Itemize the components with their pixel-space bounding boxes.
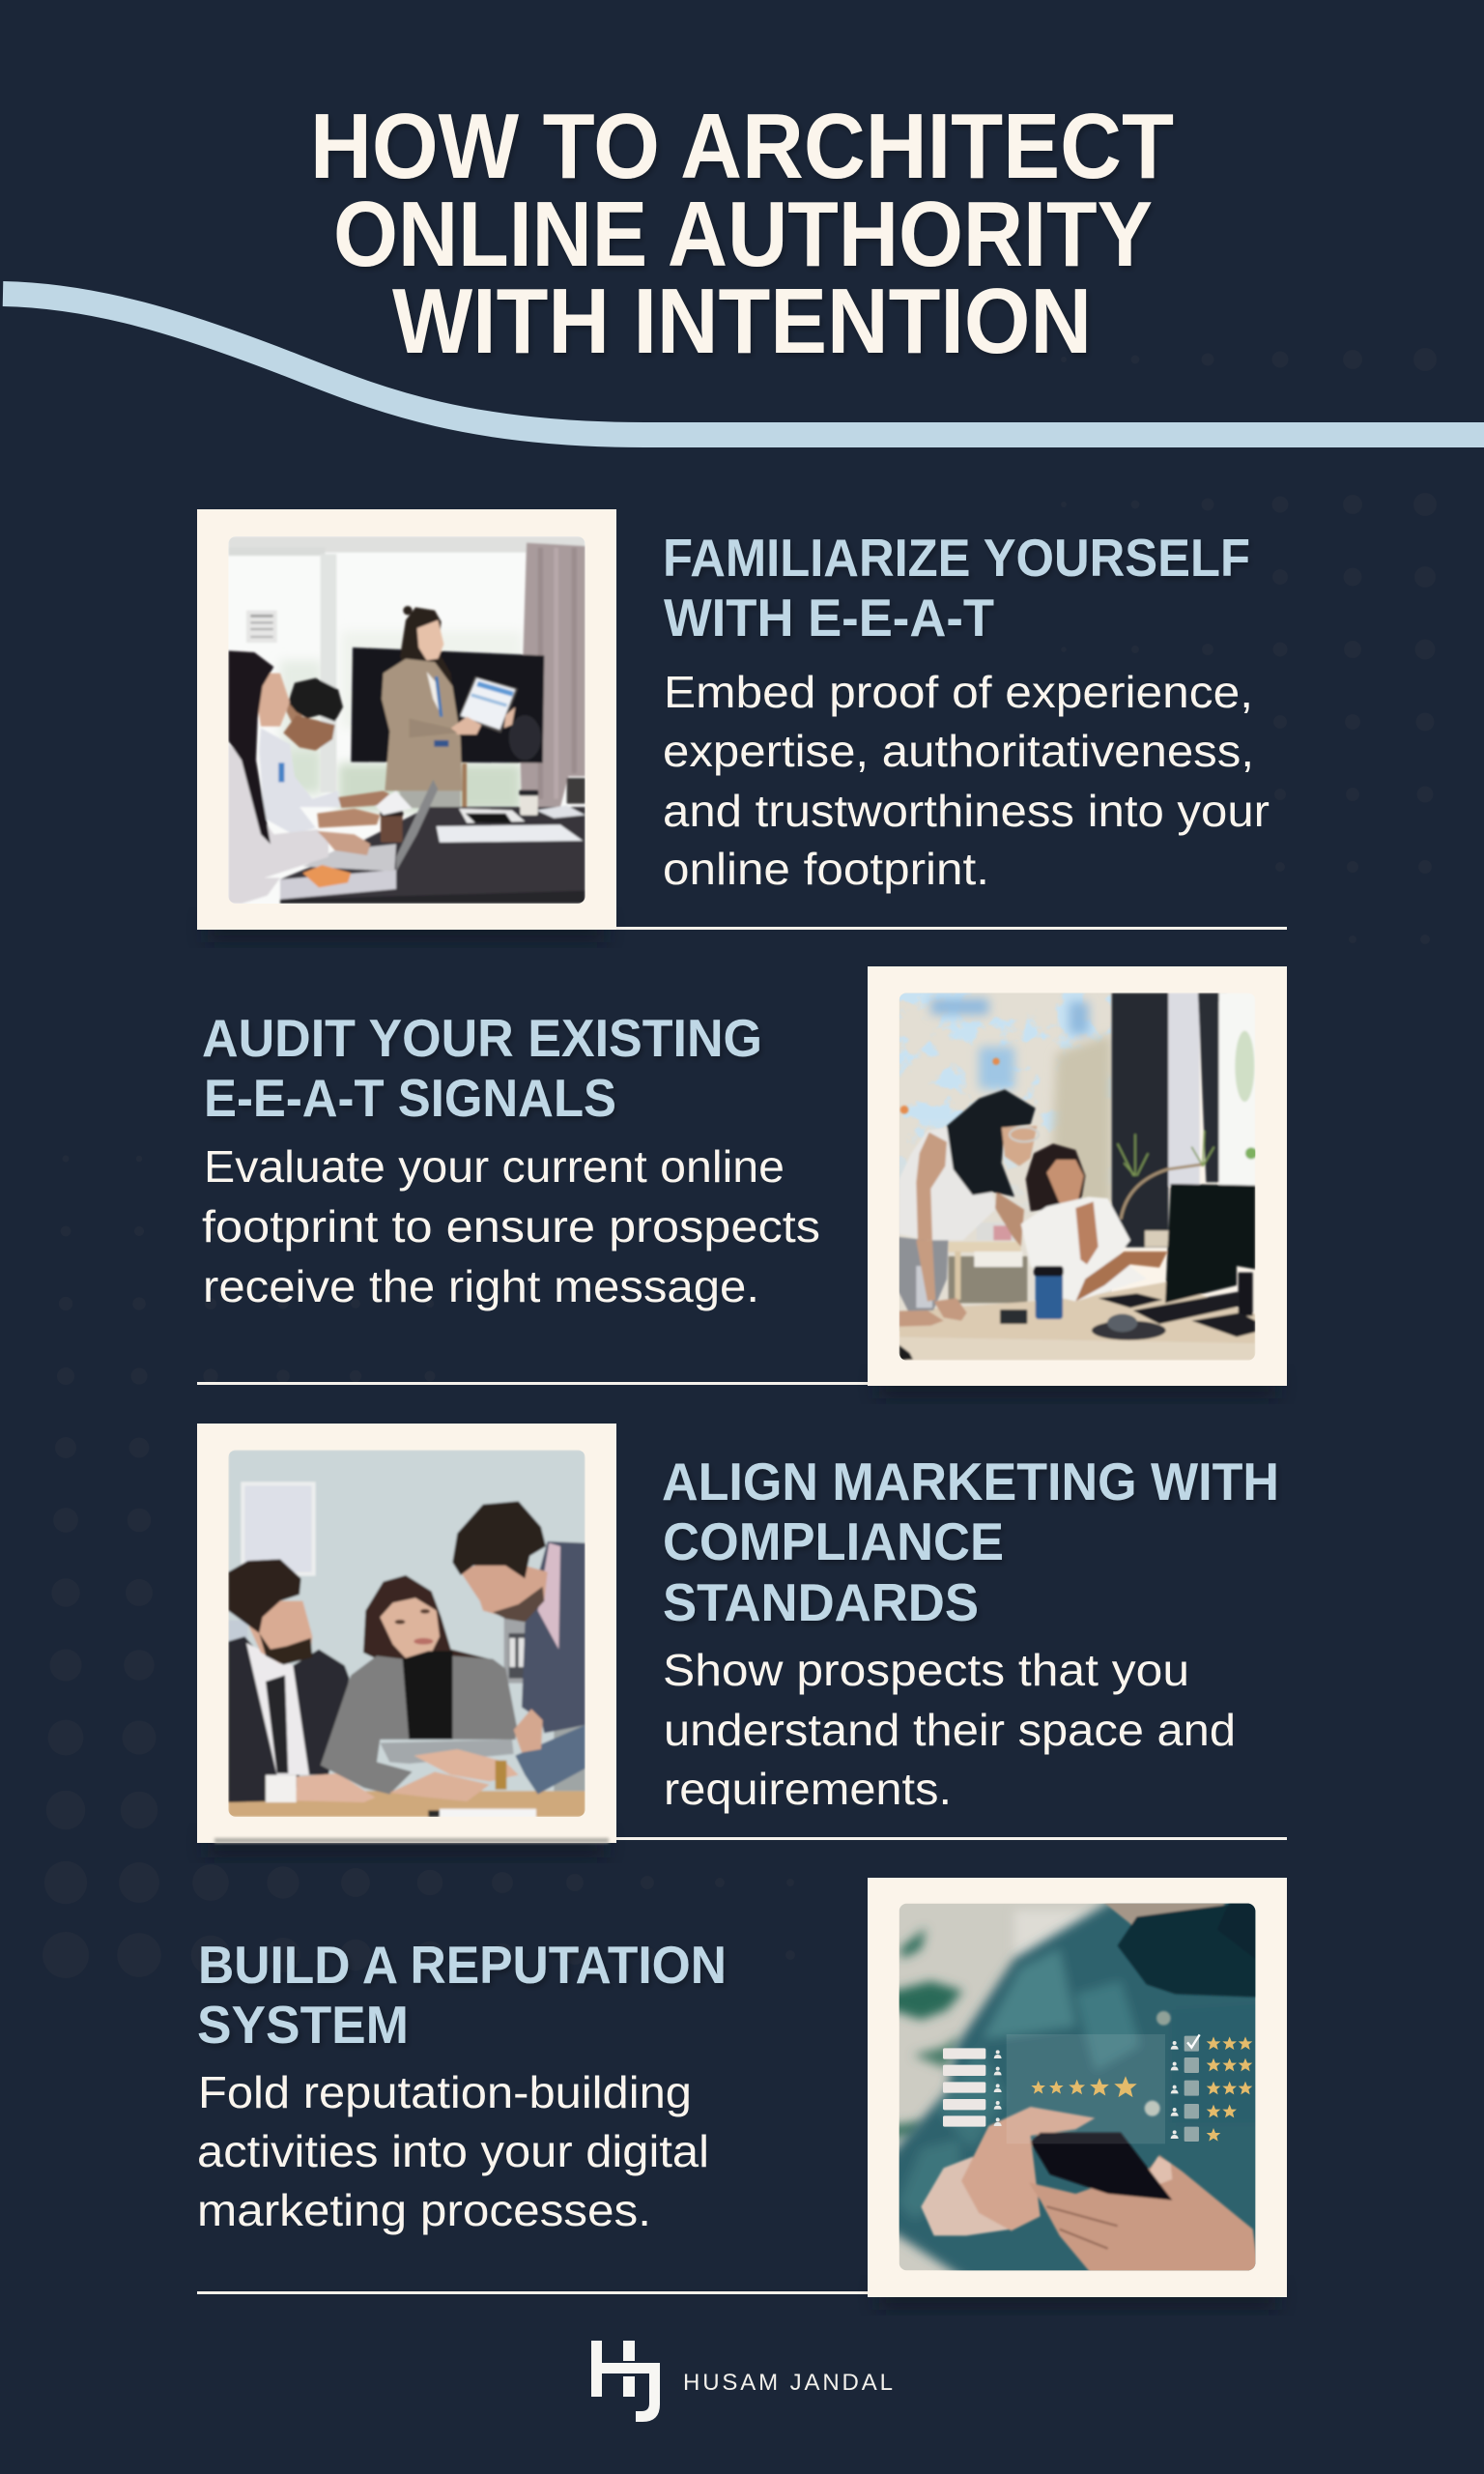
wave ribbon xyxy=(3,294,1484,435)
photo card: two women at a monitor xyxy=(868,966,1287,1386)
photo card: phone with star ratings xyxy=(868,1878,1301,2316)
heading xyxy=(197,1935,727,2055)
body text: Embed proof of experience, xyxy=(664,667,1253,717)
heading: COMPLIANCE xyxy=(663,1511,1004,1571)
heading xyxy=(663,528,1250,647)
body text: understand their space and xyxy=(664,1705,1236,1755)
title xyxy=(310,95,1174,373)
body text: online footprint. xyxy=(663,844,989,894)
body text: Show prospects that you xyxy=(663,1645,1189,1695)
body text: receive the right message. xyxy=(203,1261,759,1311)
heading: BUILD A REPUTATION xyxy=(198,1935,727,1995)
heading: E-E-A-T SIGNALS xyxy=(204,1068,616,1128)
body text xyxy=(197,2067,709,2235)
heading: STANDARDS xyxy=(663,1572,979,1632)
heading: SYSTEM xyxy=(197,1995,409,2055)
panel: familiarize yourself with E-E-A-T xyxy=(197,509,1287,942)
body text: Evaluate your current online xyxy=(204,1141,785,1192)
heading xyxy=(202,1008,762,1128)
body text xyxy=(202,1141,820,1311)
panel: audit your existing signals xyxy=(197,966,1287,1398)
footer logo xyxy=(591,2341,893,2422)
brand name: HUSAM JANDAL xyxy=(683,2370,893,2396)
body text: activities into your digital xyxy=(197,2126,709,2176)
panel: build a reputation system xyxy=(197,1878,1301,2316)
heading: AUDIT YOUR EXISTING xyxy=(202,1008,762,1068)
heading xyxy=(662,1452,1279,1632)
title: ONLINE AUTHORITY xyxy=(333,183,1153,286)
heading: ALIGN MARKETING WITH xyxy=(662,1452,1279,1511)
title: HOW TO ARCHITECT xyxy=(310,95,1174,198)
panel: align marketing with compliance standards xyxy=(197,1424,1287,1857)
body text: marketing processes. xyxy=(197,2185,651,2235)
body text: expertise, authoritativeness, xyxy=(663,726,1254,776)
body text xyxy=(663,667,1270,894)
title: WITH INTENTION xyxy=(392,270,1092,373)
body text: footprint to ensure prospects xyxy=(202,1201,820,1251)
photo card: presenter in meeting room xyxy=(197,509,616,930)
body text: and trustworthiness into your xyxy=(663,786,1270,836)
heading: FAMILIARIZE YOURSELF xyxy=(663,528,1250,588)
icon: HJ monogram xyxy=(591,2341,660,2422)
heading: WITH E-E-A-T xyxy=(664,588,994,647)
body text: Fold reputation-building xyxy=(198,2067,692,2117)
photo card: three colleagues with tablet xyxy=(197,1424,616,1843)
body text: requirements. xyxy=(664,1764,952,1814)
body text xyxy=(663,1645,1236,1814)
